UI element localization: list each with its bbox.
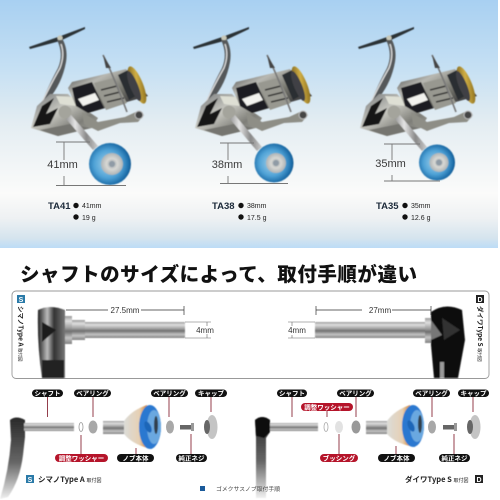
spec TA41: 41mm	[82, 203, 102, 210]
panel: reel comparison background	[0, 0, 498, 248]
part: bearing	[352, 420, 360, 434]
part: screw	[180, 423, 194, 431]
part: adjustment washer	[79, 422, 83, 432]
label: adjustment washer: 調整ワッシャー	[59, 452, 104, 462]
label: cap: キャップ	[198, 388, 224, 398]
part: bearing	[88, 420, 98, 434]
dimension 4mm Daiwa	[288, 322, 315, 338]
label: bearing: ベアリング	[339, 388, 372, 398]
label: bearing: ベアリング	[76, 388, 109, 398]
spec TA35: 35mm	[411, 203, 431, 210]
part: bearing right	[166, 420, 174, 434]
dimension 27.5mm	[66, 306, 184, 315]
label: cap: キャップ	[460, 388, 487, 398]
part: bushing	[335, 421, 343, 433]
reel TA41	[29, 27, 150, 150]
panel: shaft sizes	[12, 291, 489, 378]
spec TA35	[376, 201, 431, 222]
label: bearing: ベアリング	[153, 388, 186, 398]
part: cap	[467, 415, 480, 439]
heading: シャフトのサイズによって、取付手順が違い	[20, 258, 417, 287]
dimension 41mm	[47, 142, 126, 186]
assembly diagram: Daiwa Type S	[255, 388, 489, 498]
label: shaft: シャフト	[279, 388, 305, 398]
dimension 27mm: 27mm	[369, 306, 391, 315]
dimension 38mm: 38mm	[212, 159, 242, 171]
part: knob body	[366, 405, 424, 447]
spec TA38	[212, 201, 267, 222]
label: genuine screw: 純正ネジ	[178, 452, 205, 462]
label: knob body: ノブ本体	[384, 452, 410, 462]
caption: Daiwa: D	[476, 477, 482, 484]
spec TA35: 12.6 g	[411, 215, 431, 222]
vertical label Daiwa Type S: ダイワType S 取付図	[476, 306, 486, 362]
part: cap	[204, 415, 218, 439]
leader lines	[48, 397, 211, 454]
spec TA41	[48, 201, 102, 222]
badge S: S	[19, 297, 24, 304]
badge D: D	[477, 297, 483, 304]
caption: Shimano: S	[28, 477, 33, 484]
badge S	[17, 295, 25, 304]
knob TA38	[254, 144, 294, 182]
part: handle and shaft	[0, 418, 74, 499]
part: bearing right	[428, 420, 436, 434]
footer note: ゴメクサスノブ取付手順	[216, 484, 280, 493]
reel TA35	[358, 27, 479, 151]
dimension 35mm	[375, 144, 440, 181]
knob TA41	[89, 143, 131, 185]
dimension 38mm	[212, 143, 288, 184]
dimension 4mm Shimano: 4mm	[196, 326, 214, 335]
caption: Daiwa: ダイワType S 取付図	[405, 474, 469, 485]
dimension 35mm: 35mm	[375, 158, 406, 170]
part: handle and shaft	[255, 417, 318, 498]
leader lines	[292, 397, 473, 454]
spec TA41: 19 g	[82, 215, 96, 222]
part: adjustment washer	[324, 422, 328, 432]
part: screw	[443, 423, 457, 431]
spec TA38: 17.5 g	[247, 215, 267, 222]
vertical label Shimano Type A: シマノType A 取付図	[16, 306, 26, 362]
spec TA41: TA41	[48, 201, 71, 212]
Shimano shaft	[38, 307, 185, 378]
label: genuine screw: 純正ネジ	[442, 452, 468, 462]
knob TA35	[419, 144, 455, 180]
label: adjustment washer: 調整ワッシャー	[304, 402, 350, 412]
spec TA38: TA38	[212, 201, 235, 212]
dimension 27mm	[316, 306, 431, 315]
part: knob body	[103, 405, 161, 449]
reel TA38	[193, 27, 314, 151]
dimension 27.5mm: 27.5mm	[111, 306, 140, 315]
Daiwa shaft	[315, 306, 465, 378]
label: knob body: ノブ本体	[122, 452, 149, 462]
label: bushing: ブッシング	[323, 452, 356, 462]
assembly diagram: Shimano Type A	[0, 388, 227, 499]
dimension 4mm Shimano	[185, 322, 214, 338]
dimension 41mm: 41mm	[47, 159, 78, 171]
label: bearing: ベアリング	[415, 388, 448, 398]
label: shaft: シャフト	[34, 388, 60, 398]
spec TA35: TA35	[376, 201, 399, 212]
spec TA38: 38mm	[247, 203, 267, 210]
badge D	[476, 295, 484, 304]
dimension 4mm Daiwa: 4mm	[288, 326, 306, 335]
caption: Shimano: シマノType A 取付図	[38, 474, 101, 485]
